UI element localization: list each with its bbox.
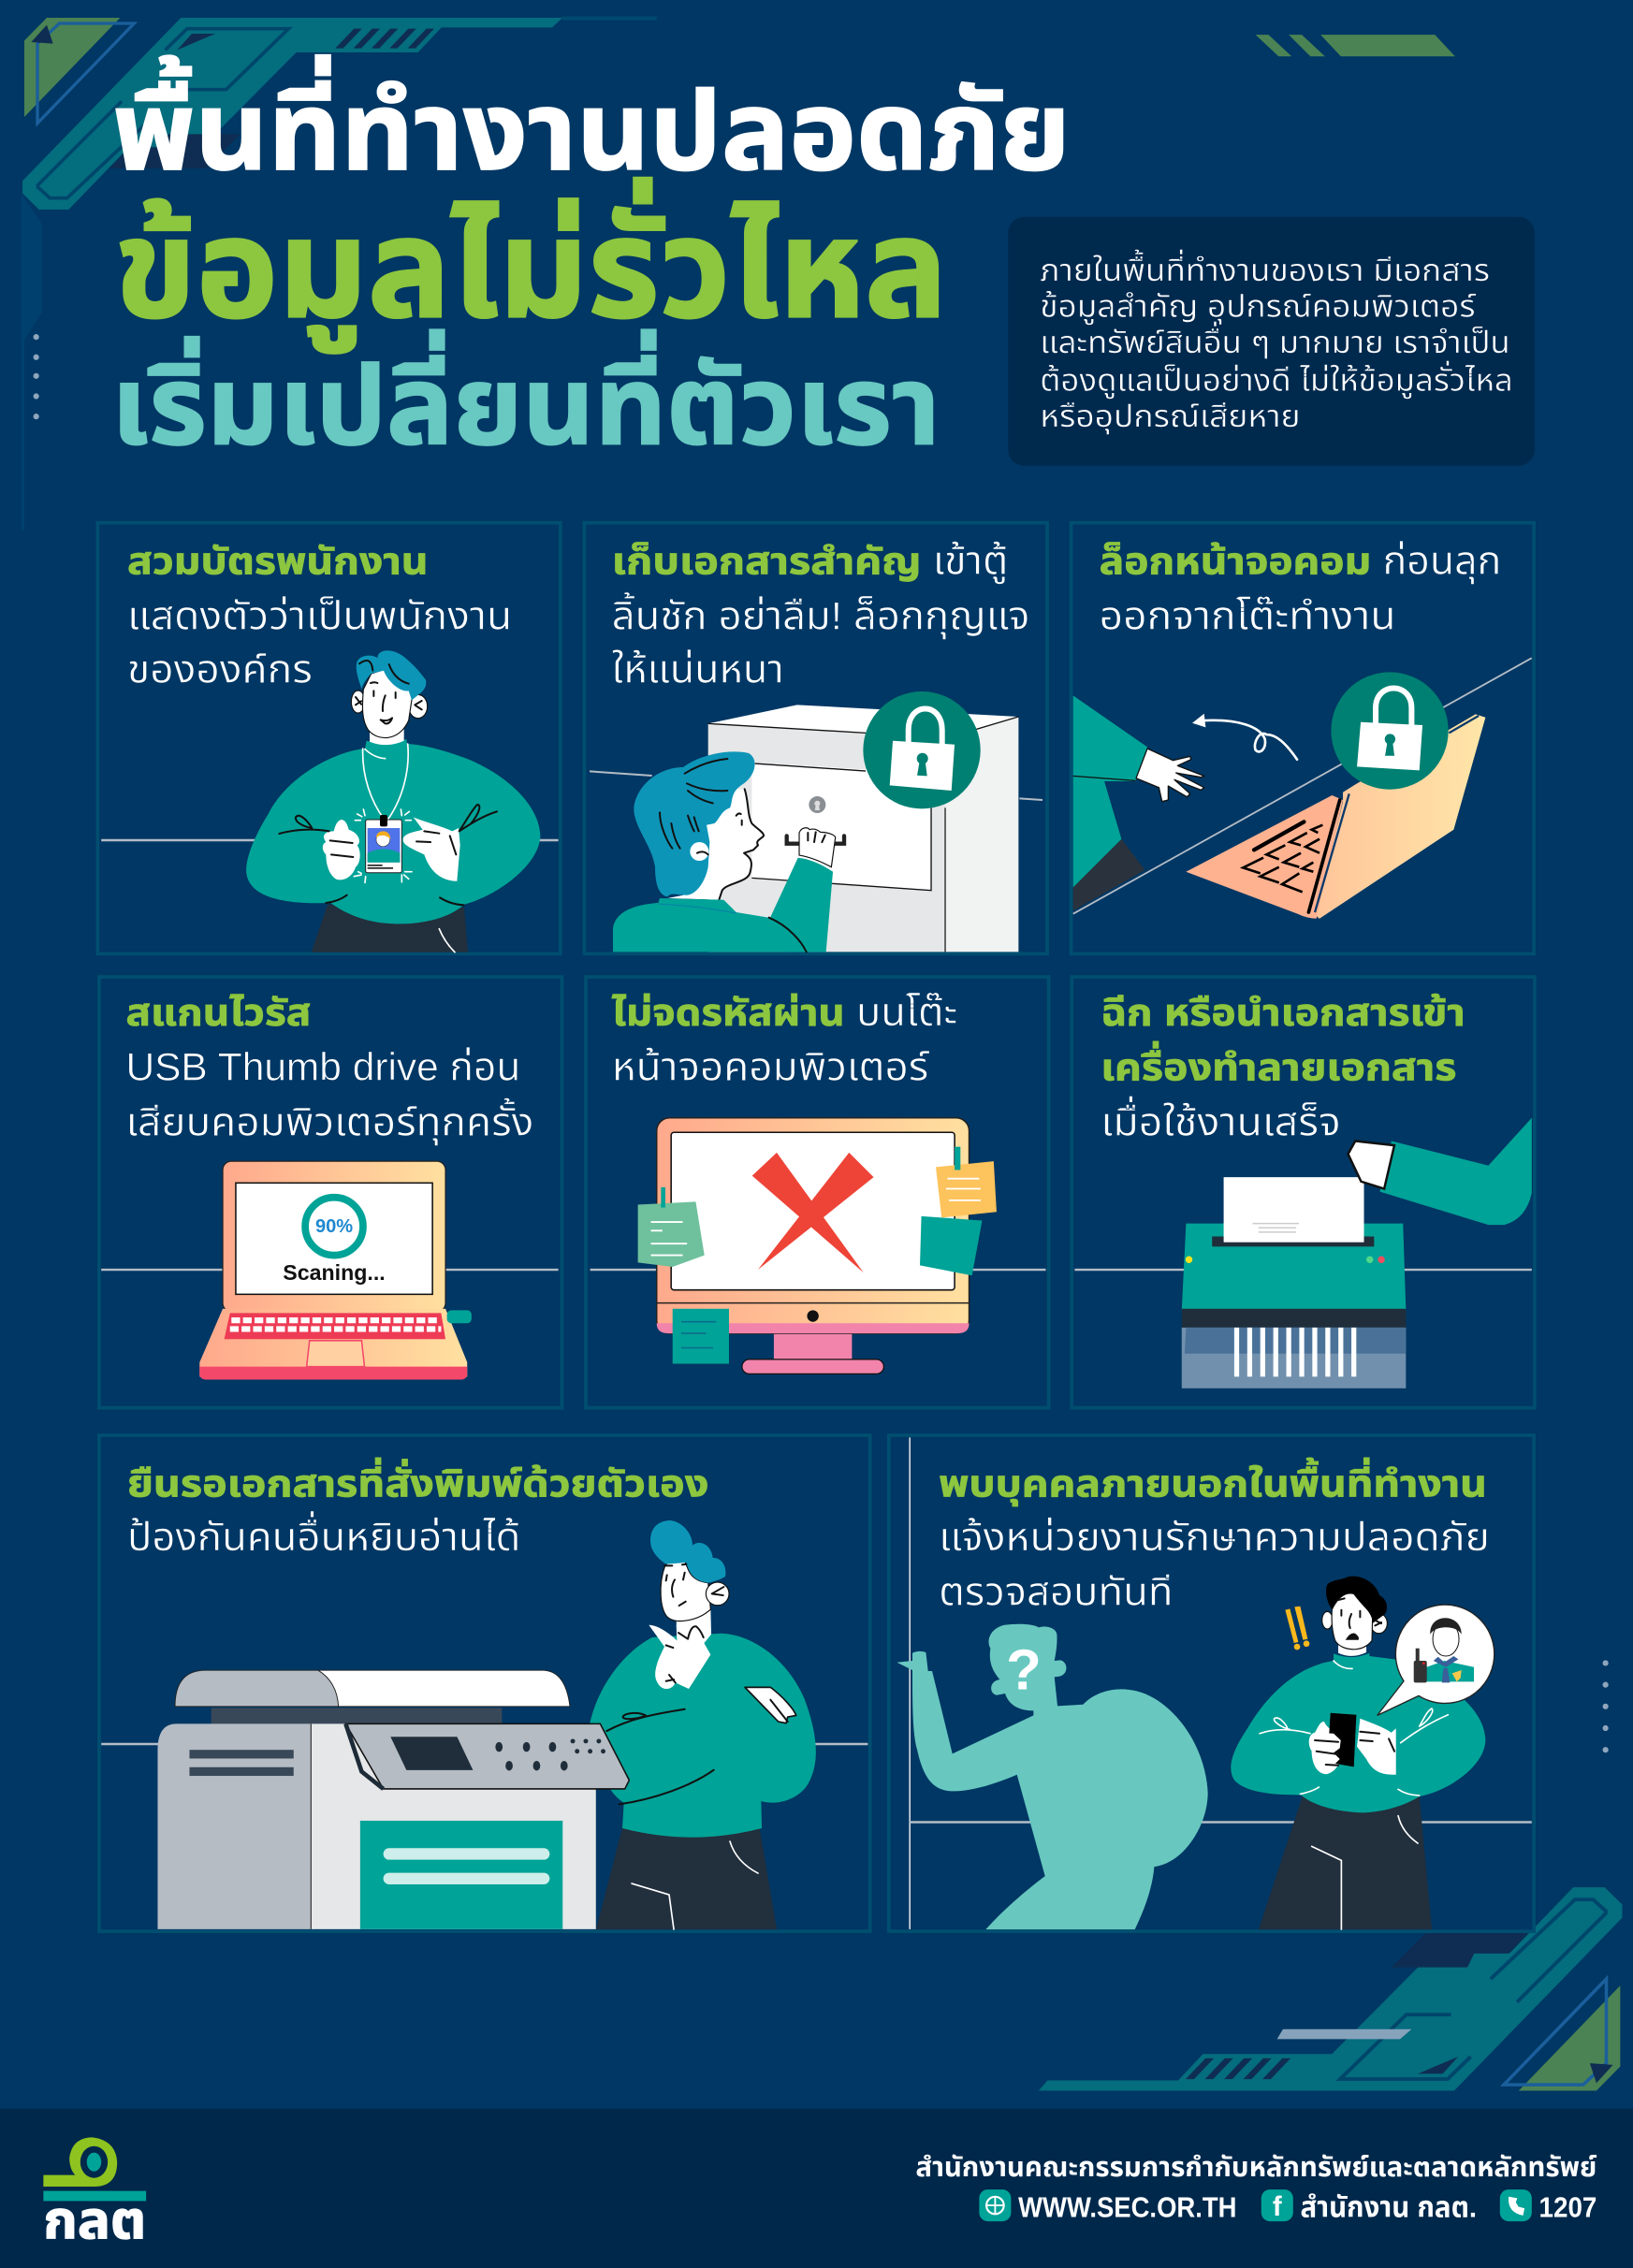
arrow: curved motion — [1192, 714, 1297, 760]
logo: SEC — [43, 2137, 146, 2250]
panel heading and text: บนโต๊ะ — [856, 990, 957, 1034]
title — [111, 54, 1071, 468]
panel heading and text: ให้แน่นหนา — [612, 647, 784, 691]
footer: facebook contact: f — [1273, 2191, 1282, 2222]
decoration: top-right green bars — [1256, 35, 1455, 56]
illustration: monitor with sticky notes — [638, 1118, 997, 1374]
title line 3: เริ่มเปลี่ยนที่ตัวเรา — [111, 329, 940, 468]
callout: security guard speech bubble — [1378, 1605, 1494, 1715]
illustration: arm leaving desk — [1073, 695, 1204, 910]
panel heading and text: พบบุคคลภายนอกในพื้นที่ทำงาน — [939, 1458, 1487, 1507]
footer: website contact: WWW.SEC.OR.TH — [1018, 2190, 1237, 2223]
panel heading and text: หน้าจอคอมพิวเตอร์ — [612, 1045, 929, 1089]
decoration: left dots — [34, 334, 39, 419]
decoration: right dots — [1603, 1660, 1609, 1752]
intro text box — [1008, 217, 1535, 466]
panel heading and text: ก่อนลุก — [1383, 539, 1501, 585]
panel heading and text: ฉีก หรือนำเอกสารเข้า — [1101, 992, 1465, 1034]
panel heading and text: ป้องกันคนอื่นหยิบอ่านได้ — [127, 1510, 520, 1559]
panel heading and text: เก็บเอกสารสำคัญ — [612, 541, 922, 583]
panel heading and text — [612, 990, 957, 1089]
intro text box: หรืออุปกรณ์เสียหาย — [1040, 400, 1301, 435]
panel: wait for printed documents — [99, 1435, 870, 1931]
footer: phone contact: 1207 — [1539, 2190, 1597, 2223]
illustration: stranger silhouette: ? — [1006, 1637, 1042, 1702]
panel heading and text: ไม่จดรหัสผ่าน — [612, 992, 845, 1034]
icon: padlock — [1331, 672, 1449, 790]
panel: report strangers — [889, 1435, 1534, 1931]
panel heading and text — [612, 539, 1029, 691]
decoration: top-left tech shape — [22, 18, 657, 531]
panel heading and text: ล็อกหน้าจอคอม — [1100, 541, 1371, 583]
illustration: person showing ID badge — [246, 650, 540, 952]
panel heading and text: เครื่องทำลายเอกสาร — [1101, 1041, 1456, 1089]
illustration: employee with phone — [1231, 1577, 1494, 1929]
panel heading and text: เมื่อใช้งานเสร็จ — [1101, 1095, 1341, 1143]
panel: scan USB for virus — [99, 977, 561, 1408]
panel heading and text: เข้าตู้ — [933, 539, 1008, 585]
footer: phone contact — [1500, 2189, 1597, 2223]
panel: wear employee badge — [97, 523, 561, 953]
footer: facebook contact: สำนักงาน กลต. — [1301, 2190, 1477, 2223]
panel: lock computer screen — [1072, 523, 1534, 953]
illustration: laptop scanning: Scaning... — [283, 1260, 386, 1285]
panel heading and text: ออกจากโต๊ะทำงาน — [1100, 593, 1396, 637]
panel: shred documents — [1072, 977, 1535, 1408]
intro text box: และทรัพย์สินอื่น ๆ มากมาย เราจำเป็น — [1040, 321, 1510, 360]
panel heading and text: สแกนไวรัส — [125, 992, 311, 1034]
intro text box: ต้องดูแลเป็นอย่างดี ไม่ให้ข้อมูลรั่วไหล — [1040, 360, 1513, 399]
panel heading and text: ยืนรอเอกสารที่สั่งพิมพ์ด้วยตัวเอง — [127, 1458, 708, 1505]
panel: do not write passwords — [586, 977, 1049, 1408]
intro text box: ภายในพื้นที่ทำงานของเรา มีเอกสาร — [1040, 249, 1490, 288]
panel heading and text: แสดงตัวว่าเป็นพนักงาน — [127, 593, 512, 637]
panel heading and text: USB Thumb drive ก่อน — [125, 1045, 520, 1089]
icon: padlock — [863, 691, 981, 808]
illustration: laptop scanning — [199, 1161, 472, 1380]
illustration: paper shredder — [1182, 1177, 1406, 1388]
logo: SEC: กลต — [43, 2192, 146, 2250]
icon: exclamation marks — [1285, 1606, 1309, 1650]
panel heading and text — [125, 992, 533, 1145]
illustration: person closing drawer — [613, 751, 836, 952]
illustration: stranger silhouette — [897, 1624, 1208, 1929]
intro text box: ข้อมูลสำคัญ อุปกรณ์คอมพิวเตอร์ — [1040, 289, 1477, 325]
decoration: bottom-right tech shape — [1039, 1887, 1622, 2090]
title line 1: พื้นที่ทำงานปลอดภัย — [113, 54, 1071, 193]
panel heading and text: ลิ้นชัก อย่าลืม! ล็อกกุญแจ — [612, 591, 1029, 639]
illustration: laptop — [1186, 714, 1485, 919]
panel heading and text: แจ้งหน่วยงานรักษาความปลอดภัย — [939, 1515, 1490, 1559]
footer: organization name: สำนักงานคณะกรรมการกำกับหลักทรัพย์และตลาดหลักทรัพย์ — [915, 2152, 1597, 2183]
panel heading and text — [939, 1458, 1490, 1614]
panel heading and text: เสียบคอมพิวเตอร์ทุกครั้ง — [125, 1098, 533, 1145]
footer — [0, 2109, 1633, 2268]
illustration: filing cabinet — [708, 705, 1018, 952]
panel: lock documents in drawer — [584, 523, 1047, 953]
panel heading and text: สวมบัตรพนักงาน — [127, 541, 429, 583]
illustration: laptop scanning: 90% — [315, 1216, 353, 1237]
panel heading and text — [127, 541, 512, 691]
illustration: photocopier — [157, 1670, 629, 1929]
illustration: person waiting — [590, 1520, 816, 1929]
panel heading and text — [1100, 539, 1501, 637]
panel heading and text: ตรวจสอบทันที — [939, 1570, 1173, 1614]
panel heading and text — [1101, 992, 1465, 1143]
illustration: arm feeding paper — [1349, 1118, 1532, 1225]
panel heading and text — [127, 1458, 708, 1559]
panel heading and text: ขององค์กร — [127, 647, 313, 691]
title line 2: ข้อมูลไม่รั่วไหล — [114, 178, 947, 353]
